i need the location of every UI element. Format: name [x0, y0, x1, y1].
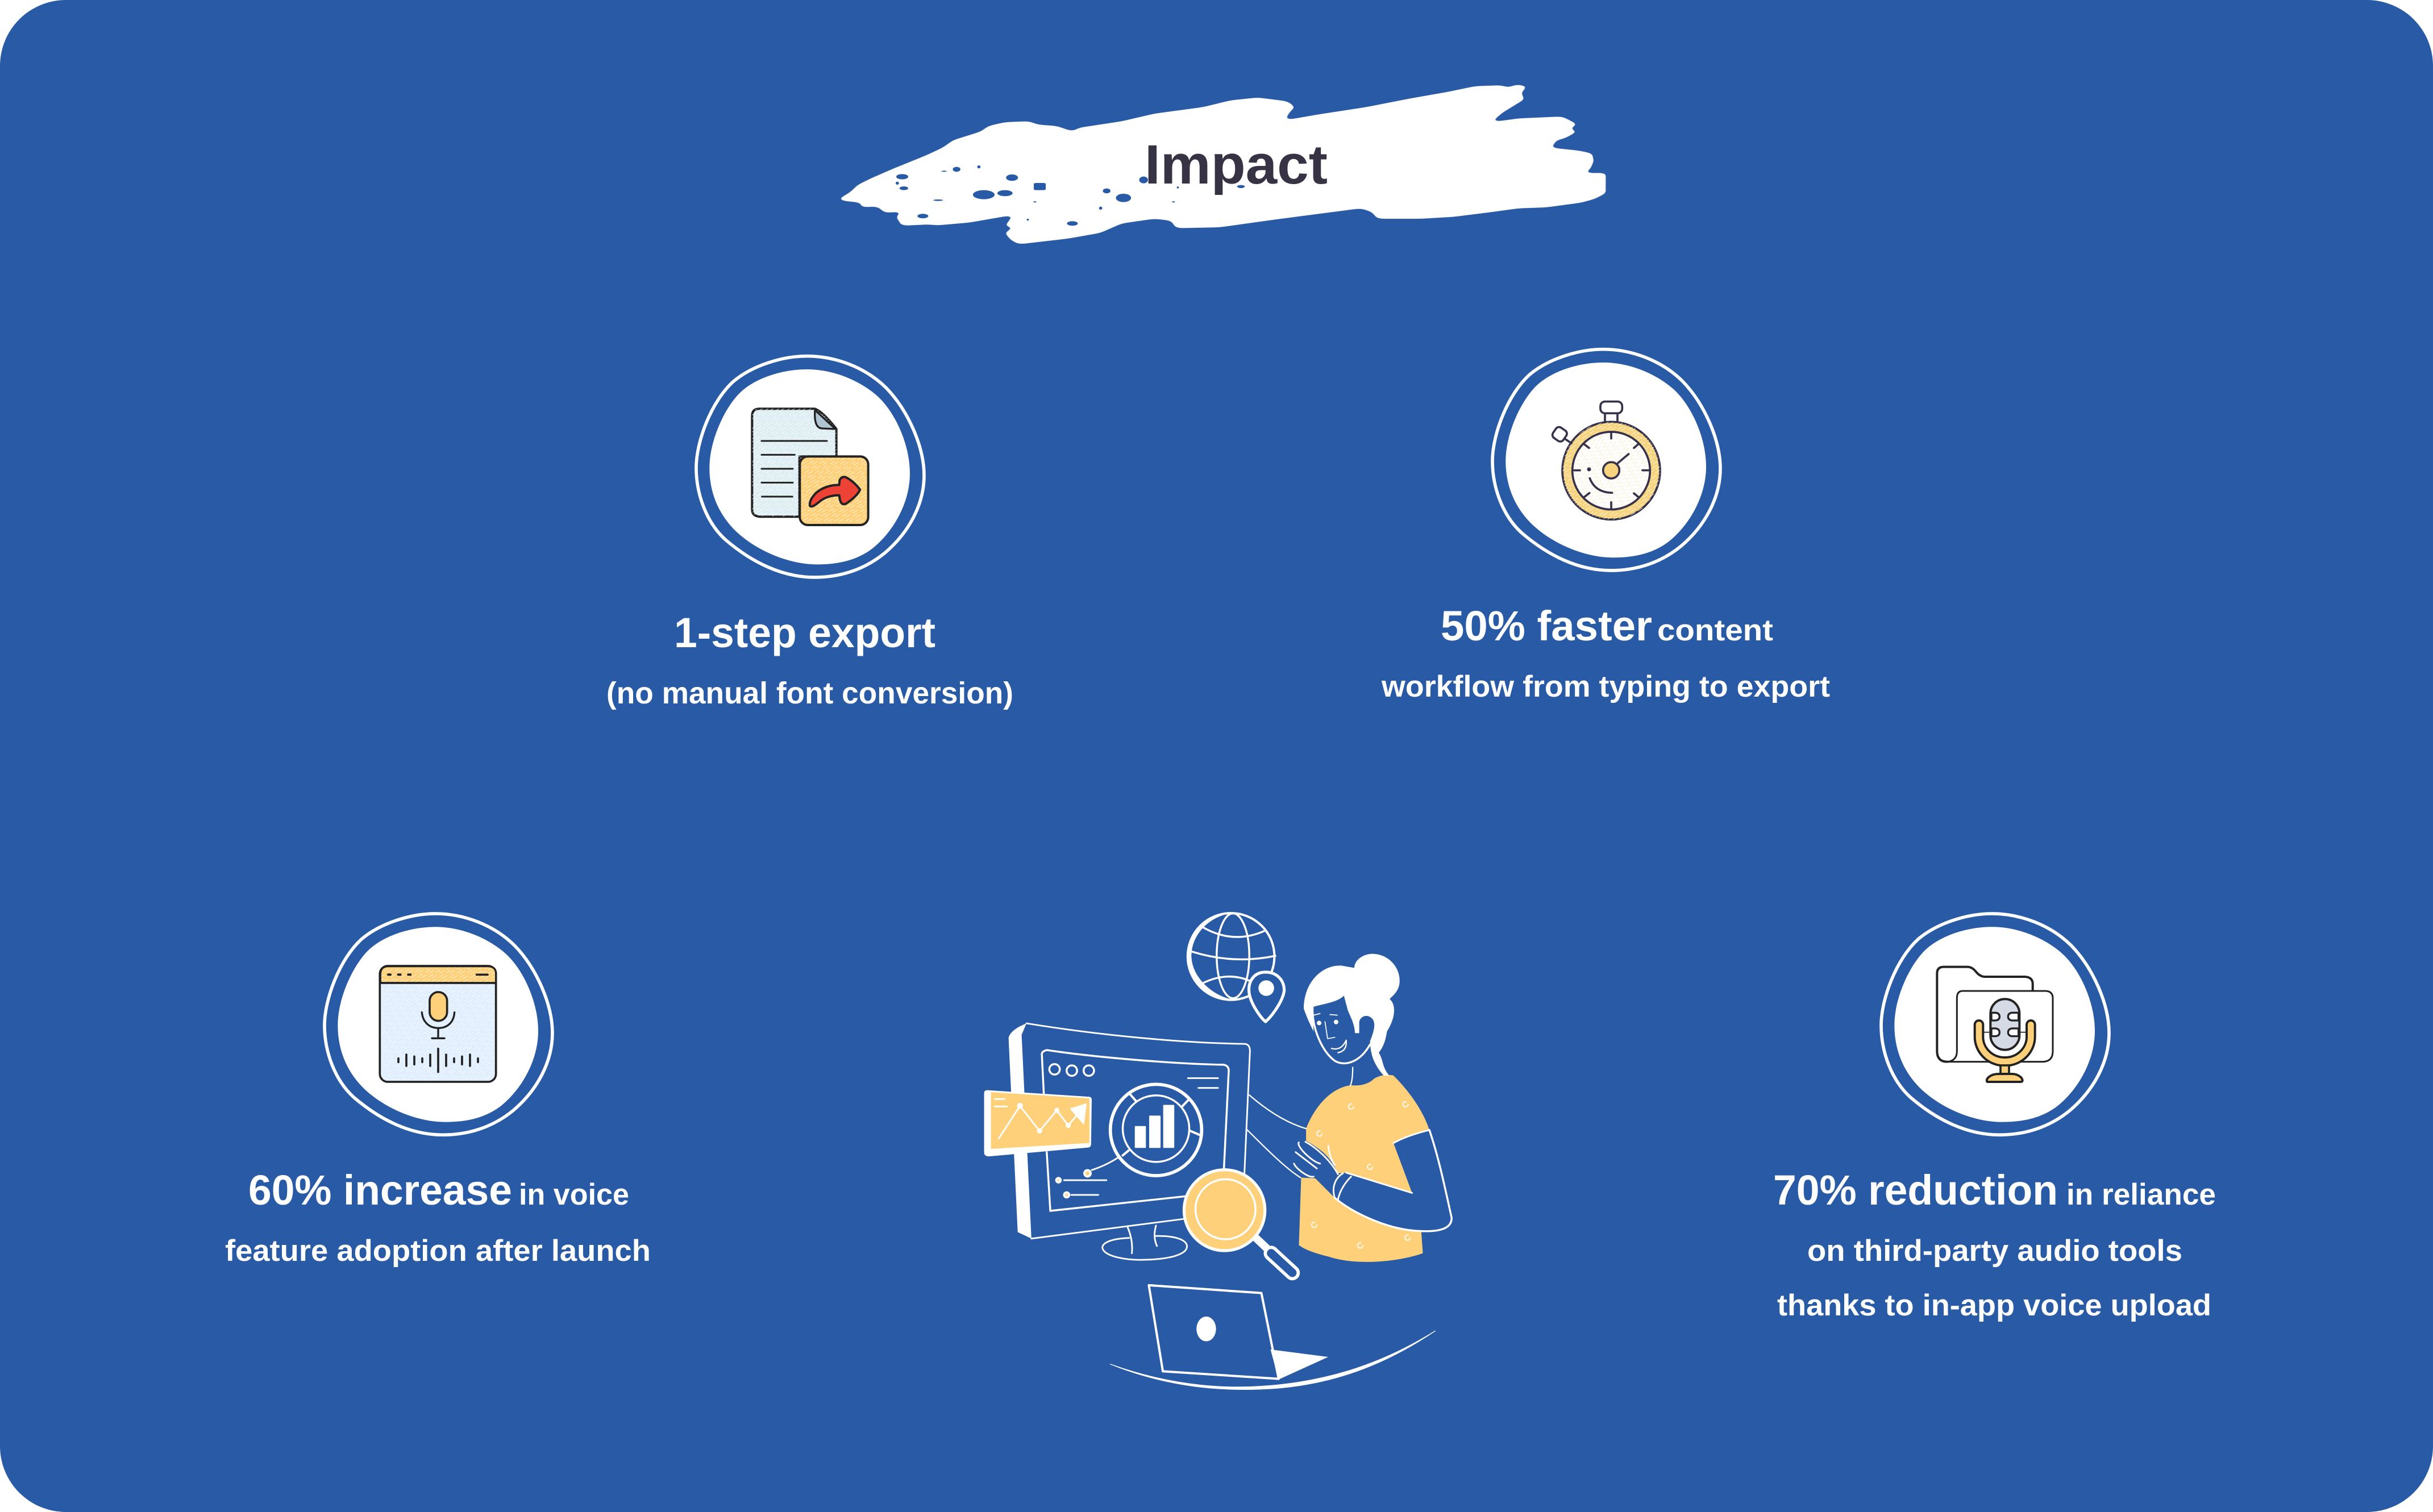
stat heading suffix: in reliance	[2066, 1178, 2216, 1211]
stat heading suffix: in voice	[519, 1178, 629, 1211]
stat detail: (no manual font conversion)	[606, 676, 1013, 710]
stat heading: 1-step export	[674, 609, 935, 656]
stat detail line 2: thanks to in-app voice upload	[1777, 1289, 2211, 1322]
stat heading suffix: content	[1657, 614, 1773, 647]
stat heading: 60% increase	[248, 1167, 512, 1214]
brush stroke	[839, 84, 1606, 244]
stat detail line 1: on third-party audio tools	[1807, 1234, 2182, 1268]
stat card: 70% reduction	[1773, 914, 2216, 1322]
laptop	[1149, 1285, 1328, 1380]
stat heading: 50% faster	[1441, 602, 1652, 649]
ground arc	[1111, 1331, 1435, 1389]
stat card: 60% increase	[225, 914, 651, 1268]
woman	[1247, 954, 1452, 1262]
title banner	[839, 84, 1606, 244]
stat card: 50% faster	[1381, 349, 1830, 703]
stat detail: feature adoption after launch	[225, 1234, 651, 1268]
icon: stopwatch	[1492, 349, 1720, 570]
bar chart dial	[1055, 1084, 1201, 1198]
stat detail: workflow from typing to export	[1381, 670, 1830, 703]
stat heading: 70% reduction	[1773, 1167, 2058, 1214]
monitor	[1009, 1023, 1250, 1260]
central illustration: woman with analytics monitor	[984, 913, 1452, 1389]
icon: voice recording window	[325, 914, 552, 1135]
icon: microphone folder	[1881, 914, 2109, 1135]
globe with location pin	[1188, 913, 1284, 1022]
magnifying glass	[1184, 1170, 1292, 1273]
line chart card	[984, 1090, 1092, 1156]
title text: Impact	[1145, 134, 1328, 195]
stat card: 1-step export	[606, 356, 1013, 710]
icon: document export	[696, 356, 924, 577]
